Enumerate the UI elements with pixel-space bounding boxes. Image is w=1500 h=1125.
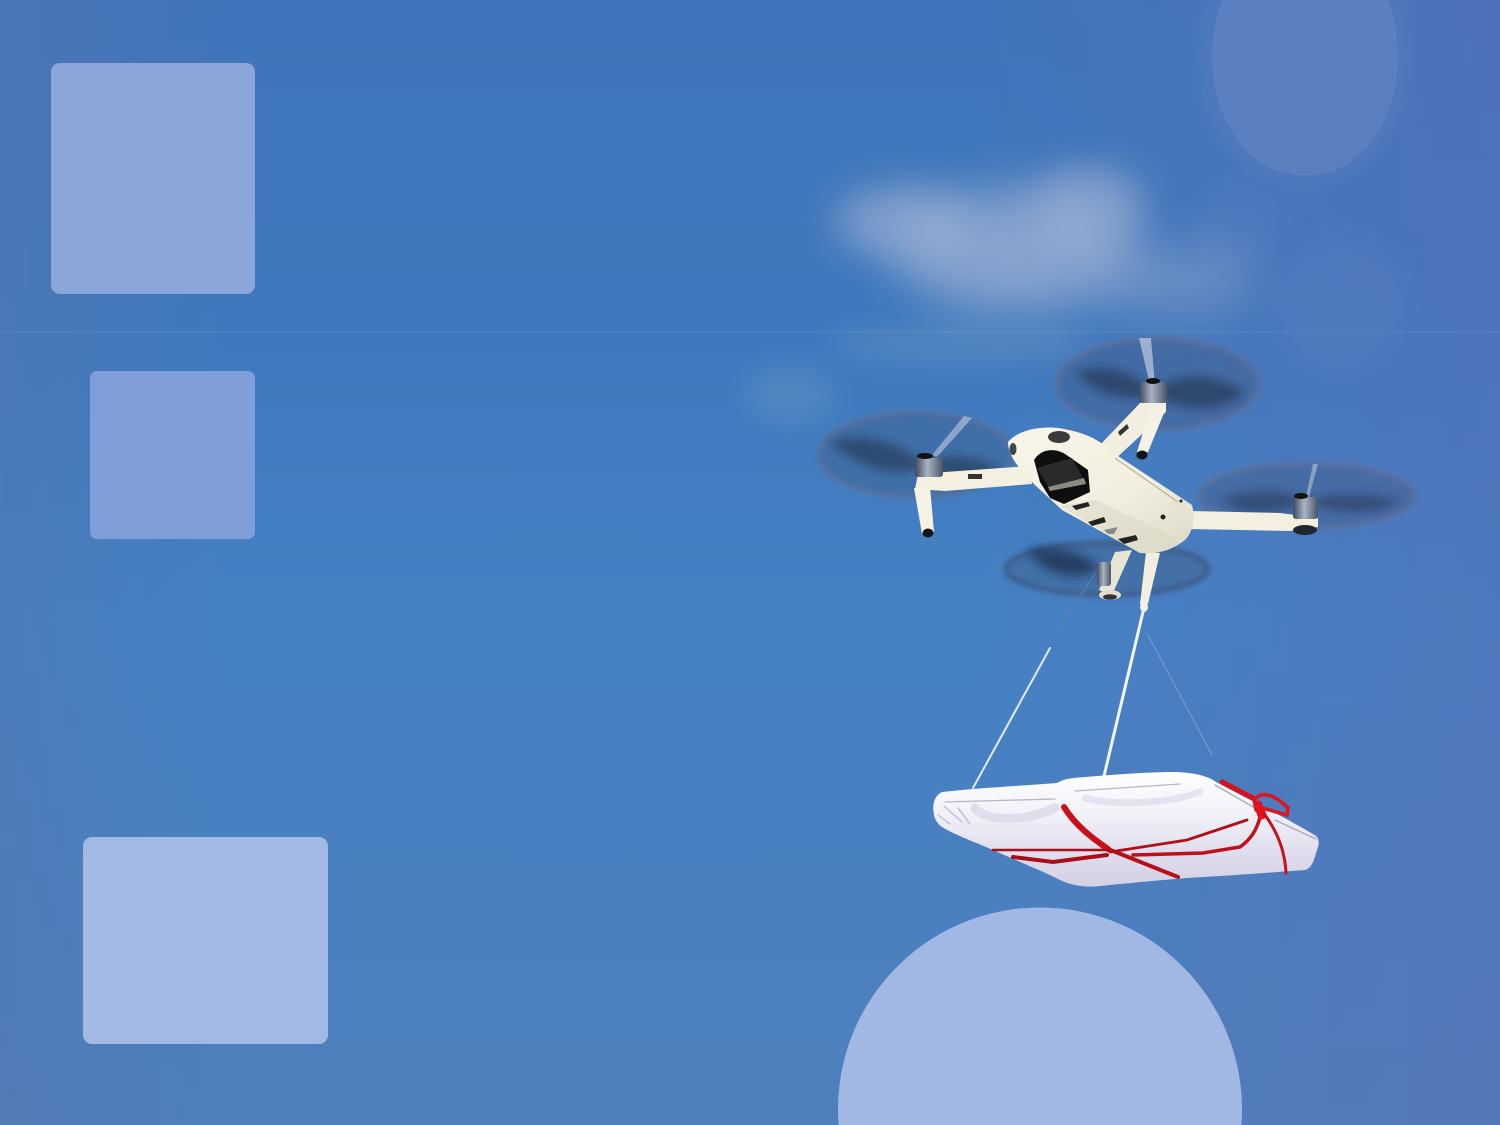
drone body seam	[1115, 458, 1178, 502]
parcel red ribbon	[993, 782, 1288, 877]
icon: drone airframe	[914, 378, 1318, 612]
drone front lower arm and motor	[1097, 550, 1132, 600]
drone hook	[1140, 552, 1160, 612]
panel: top left translucent card	[51, 63, 255, 294]
icon: drone rotor left	[819, 413, 1013, 497]
drone body	[1008, 428, 1194, 553]
drone left arm and leg	[914, 453, 1032, 538]
icon: white parcel	[933, 772, 1319, 887]
tethers	[973, 572, 1212, 788]
icon: drone rotor right	[1200, 464, 1414, 528]
circle: sun glare top right	[1195, 0, 1412, 373]
drone underside sensors	[1072, 500, 1182, 544]
icon: drone rotor front bottom	[1006, 543, 1208, 595]
icon: drone rotor back right	[1057, 338, 1259, 429]
circle: bottom centre semicircle panel	[838, 907, 1242, 1125]
panel: middle left translucent card	[90, 371, 255, 539]
cloud	[745, 165, 1255, 425]
drone camera gimbal	[1034, 450, 1090, 504]
drone back arm and leg	[1099, 378, 1167, 462]
parcel folds	[938, 784, 1316, 839]
drone side sensor	[1010, 443, 1016, 455]
parcel cushion	[933, 772, 1319, 887]
drone nose vent	[1048, 431, 1070, 443]
panel: bottom left translucent card	[83, 837, 328, 1044]
drone right arm	[1188, 493, 1318, 535]
drone body lower shading	[1060, 500, 1180, 553]
